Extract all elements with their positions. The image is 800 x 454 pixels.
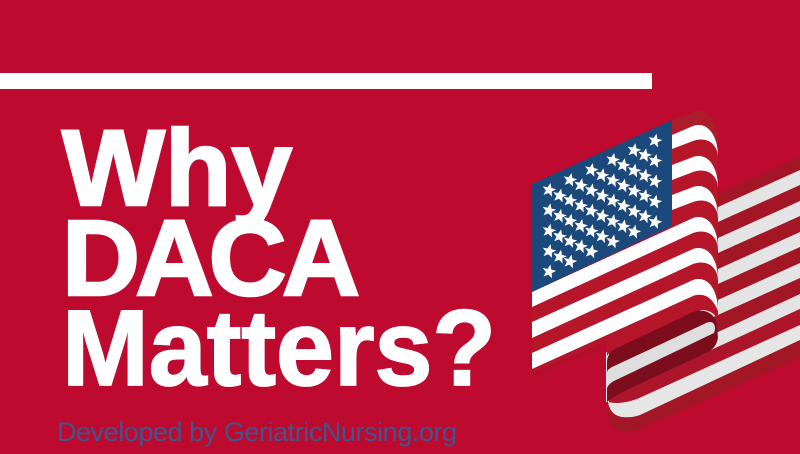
title: Why DACA Matters?: Matters? — [62, 287, 496, 408]
title: Why DACA Matters?: DACA — [62, 197, 360, 318]
title: Why DACA Matters?: Why — [62, 107, 292, 228]
icon: waving American flag — [532, 111, 800, 433]
credit line: Developed by GeriatricNursing.org — [57, 417, 457, 447]
flag stars — [541, 132, 663, 279]
flag fold: inner loop — [606, 311, 718, 402]
flag front section: stripes — [532, 111, 718, 386]
title: Why DACA Matters? — [62, 107, 496, 408]
flag back section: striped ribbon — [607, 157, 800, 433]
white top bar — [0, 73, 652, 89]
flag canton — [532, 120, 672, 292]
